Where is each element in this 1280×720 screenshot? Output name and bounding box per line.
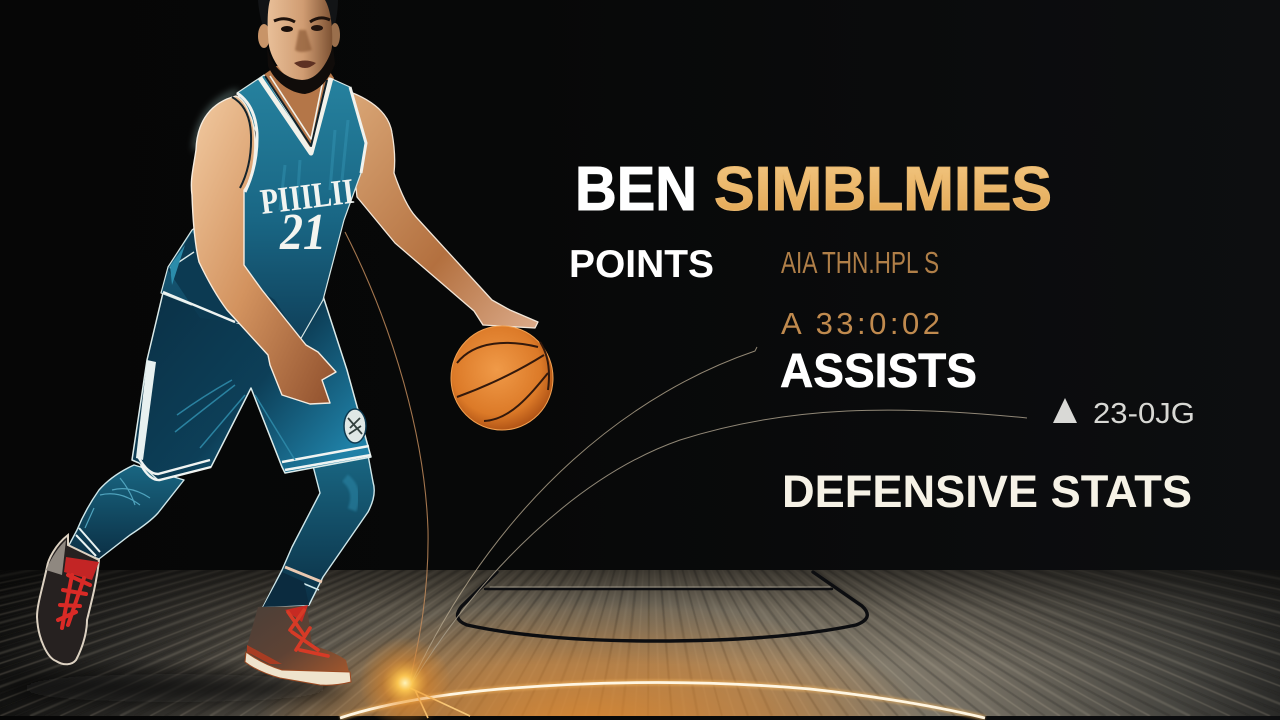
neck [262,66,334,150]
stat: assists label: ASSISTS [780,345,977,398]
left arm [191,96,336,404]
right leg [263,455,374,607]
hardwood court floor [0,570,1280,716]
stat: defensive stats label: DEFENSIVE STATS [782,466,1192,517]
title surname: SIMBLMIES [714,155,1052,224]
shorts logo [344,409,366,443]
icon: triangle marker [1053,398,1077,423]
right shoe [244,605,351,685]
jersey [161,75,366,340]
shoulder rim glow [196,92,238,150]
stat: defensive value: 23-0JG [1093,398,1195,430]
left shoe [37,535,99,664]
basketball [451,326,553,430]
title [575,155,1052,224]
court key line [458,572,867,641]
stat: points label: POINTS [569,243,714,286]
head [258,0,340,94]
stat: assists value: A 33:0:02 [781,306,940,341]
stat: points value: AIA THN.HPL S [781,245,939,280]
spark glow [359,637,451,720]
jersey number: 21 [279,204,326,261]
player [37,0,553,685]
jersey trim [232,76,366,192]
left leg [68,465,184,559]
right arm [345,90,538,328]
jersey wordmark: PIIILII [258,171,356,222]
bright court arc [340,682,985,718]
connector lines [345,232,1027,690]
shorts [132,280,371,480]
title first name: BEN [575,155,697,224]
